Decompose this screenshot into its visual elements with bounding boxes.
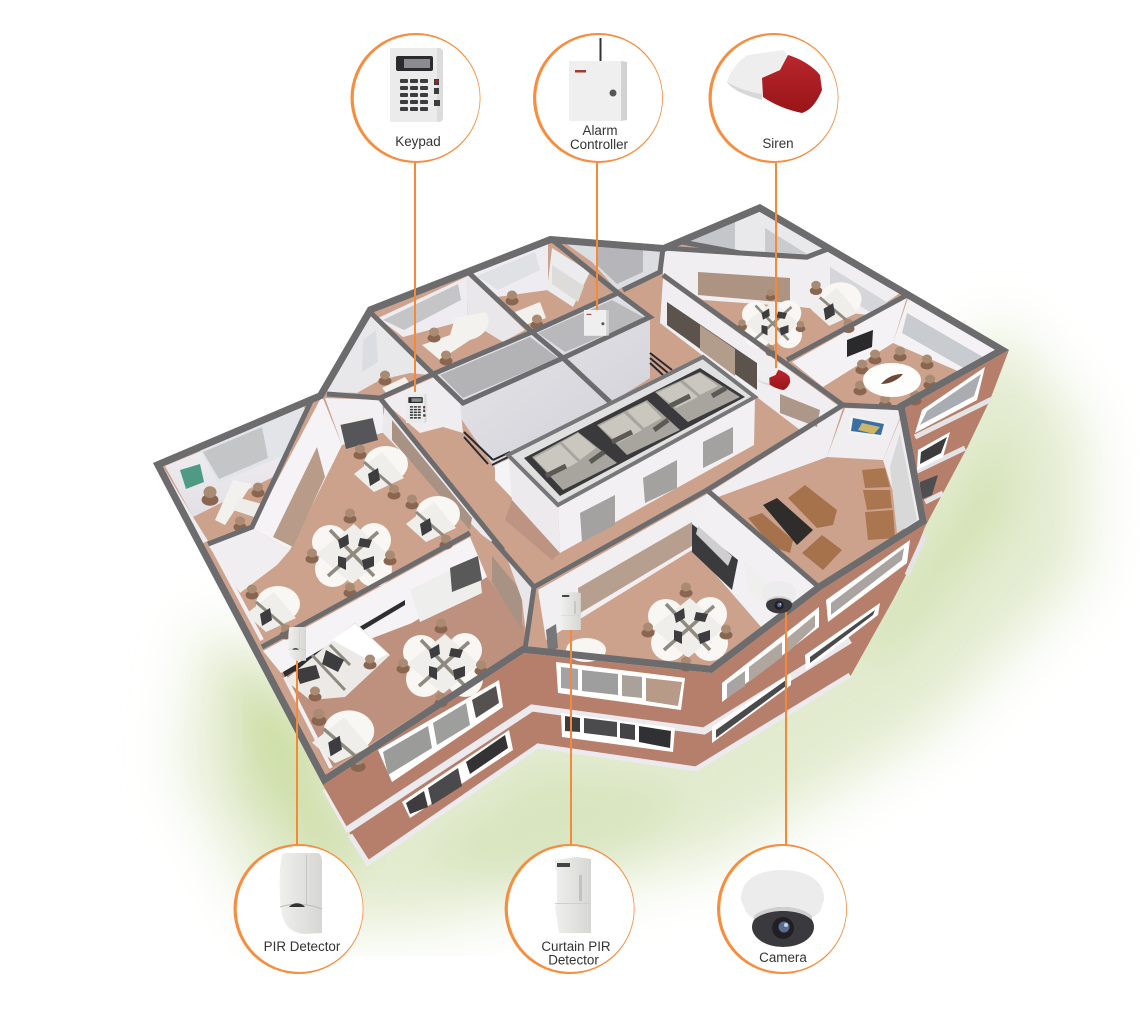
- icon: alarm controller on wall: [584, 310, 609, 336]
- room: lounge walls: [710, 408, 922, 533]
- icon: curtain PIR detector: [555, 857, 591, 933]
- room: top small alcove: [682, 210, 827, 257]
- server block walls: [508, 357, 755, 553]
- label: curtain PIR detector: Curtain PIR: [541, 939, 611, 954]
- callout: Siren: [708, 33, 838, 163]
- icon: keypad on wall: [406, 394, 427, 423]
- callout: Alarm Controller: [533, 33, 663, 163]
- room: left meeting room walls: [163, 405, 305, 545]
- lounge window: [890, 433, 917, 533]
- furniture: lower office desks: [285, 618, 488, 772]
- corridor wall by keypad: [382, 377, 463, 433]
- stair landing: [495, 458, 512, 498]
- icon: antenna: [600, 38, 602, 62]
- label: camera: Camera: [759, 950, 807, 965]
- window: side middle: [917, 432, 950, 470]
- gray wall tops: interior walls: [208, 238, 907, 650]
- callout: Camera: [717, 844, 847, 974]
- cabinet: [410, 556, 482, 622]
- callout: Keypad: [350, 33, 480, 163]
- furniture: big office desks: [246, 444, 460, 640]
- label: PIR detector: PIR Detector: [264, 939, 341, 954]
- block top rim: [508, 357, 755, 505]
- icon: siren on wall: [757, 368, 790, 390]
- window: side top: [915, 367, 985, 433]
- room: lower open office walls: [263, 537, 534, 768]
- stairs left: [464, 432, 510, 465]
- window: corner lower right wing: [805, 603, 880, 670]
- room D rear stair window: [565, 243, 660, 290]
- icon: curtain PIR on wall: [561, 592, 581, 630]
- label: alarm controller: Controller: [570, 137, 629, 152]
- building: right side ledges: [907, 399, 992, 575]
- furniture: front office desks: [546, 582, 732, 672]
- arrow: keypad leader line: [414, 163, 416, 392]
- icon: camera on wall: [761, 581, 796, 613]
- building: brick exterior: [323, 350, 1009, 865]
- glass partition left: [273, 447, 325, 547]
- white strip along outer wall: [285, 677, 331, 768]
- gray wall tops: server block rim: [508, 357, 755, 505]
- cubicle tile middle: [597, 400, 680, 455]
- icon: alarm controller: [569, 61, 627, 121]
- textured wall right: [538, 300, 645, 352]
- block shadow on floor: [505, 500, 560, 560]
- background: grass lawn: [185, 320, 1085, 925]
- window: left wing lower: [402, 730, 513, 818]
- blinds: [383, 284, 461, 330]
- furniture: meeting table and chairs: [854, 346, 936, 410]
- lower office darker floor: [281, 577, 524, 770]
- room: large open office walls: [208, 396, 503, 640]
- doors on block: [580, 495, 615, 542]
- window: front right upper: [722, 607, 819, 702]
- building: upper floor ledge: [347, 640, 850, 830]
- callout: Curtain PIR Detector: [505, 844, 635, 974]
- icon: dome camera: [741, 870, 824, 947]
- label: alarm controller: Alarm: [583, 123, 617, 138]
- room: meeting room walls: [792, 297, 997, 387]
- central core walls: [382, 295, 672, 498]
- plotter: [692, 524, 738, 590]
- room: top office walls: [663, 250, 900, 315]
- wall TV: [847, 330, 873, 357]
- room: front office walls: [538, 494, 820, 640]
- window with blinds: [200, 405, 305, 483]
- block dark interior: [524, 368, 745, 496]
- stairs right: [650, 353, 672, 375]
- cabinet: [340, 412, 378, 449]
- label: siren: Siren: [762, 136, 794, 151]
- label: keypad: Keypad: [395, 134, 441, 149]
- arrow: camera leader line: [785, 612, 787, 846]
- doors: [698, 272, 790, 303]
- icon: keypad: [390, 48, 443, 122]
- wall art: [180, 464, 204, 489]
- window: corner upper right wing: [826, 540, 910, 622]
- window: middle lower: [561, 713, 675, 752]
- arrow: alarm controller leader line: [596, 163, 598, 312]
- glass doors: [578, 522, 692, 613]
- cubicle tile left: [532, 432, 617, 490]
- painting: [848, 415, 888, 438]
- arrow: PIR detector leader line: [296, 660, 298, 846]
- building: left white edge: [324, 790, 348, 832]
- window: middle upper: [556, 662, 685, 710]
- arrow: curtain PIR leader line: [570, 630, 572, 846]
- window: [902, 313, 983, 370]
- icon: PIR detector on wall: [288, 627, 306, 661]
- furniture: lounge sofas: [748, 468, 895, 570]
- room: upper-left rooms walls: [323, 242, 660, 397]
- icon: siren: [727, 50, 822, 113]
- icon: PIR detector: [280, 853, 322, 934]
- textured wall left: [440, 337, 558, 398]
- side wall: [163, 467, 208, 545]
- furniture: upper-left room desk: [378, 290, 546, 395]
- window: front right lower: [712, 673, 791, 743]
- corridor wall with doors: [660, 278, 840, 430]
- label: curtain PIR detector: Detector: [548, 952, 599, 968]
- window: side lower: [920, 475, 938, 500]
- window: left wing upper: [378, 680, 503, 782]
- gray wall tops: outer walls: [153, 204, 1009, 785]
- doors right wall: [392, 420, 472, 530]
- white strip along outer wall: [215, 552, 262, 640]
- callout: PIR Detector: [234, 844, 364, 974]
- floor plan slab: [153, 204, 1009, 785]
- cubicle tile right: [655, 372, 740, 422]
- furniture: top office desks: [737, 281, 862, 356]
- building: base ledge: [350, 675, 850, 863]
- furniture: left room table: [202, 480, 264, 532]
- window: [830, 267, 888, 312]
- arrow: siren leader line: [775, 163, 777, 370]
- white cabinet: [743, 560, 772, 610]
